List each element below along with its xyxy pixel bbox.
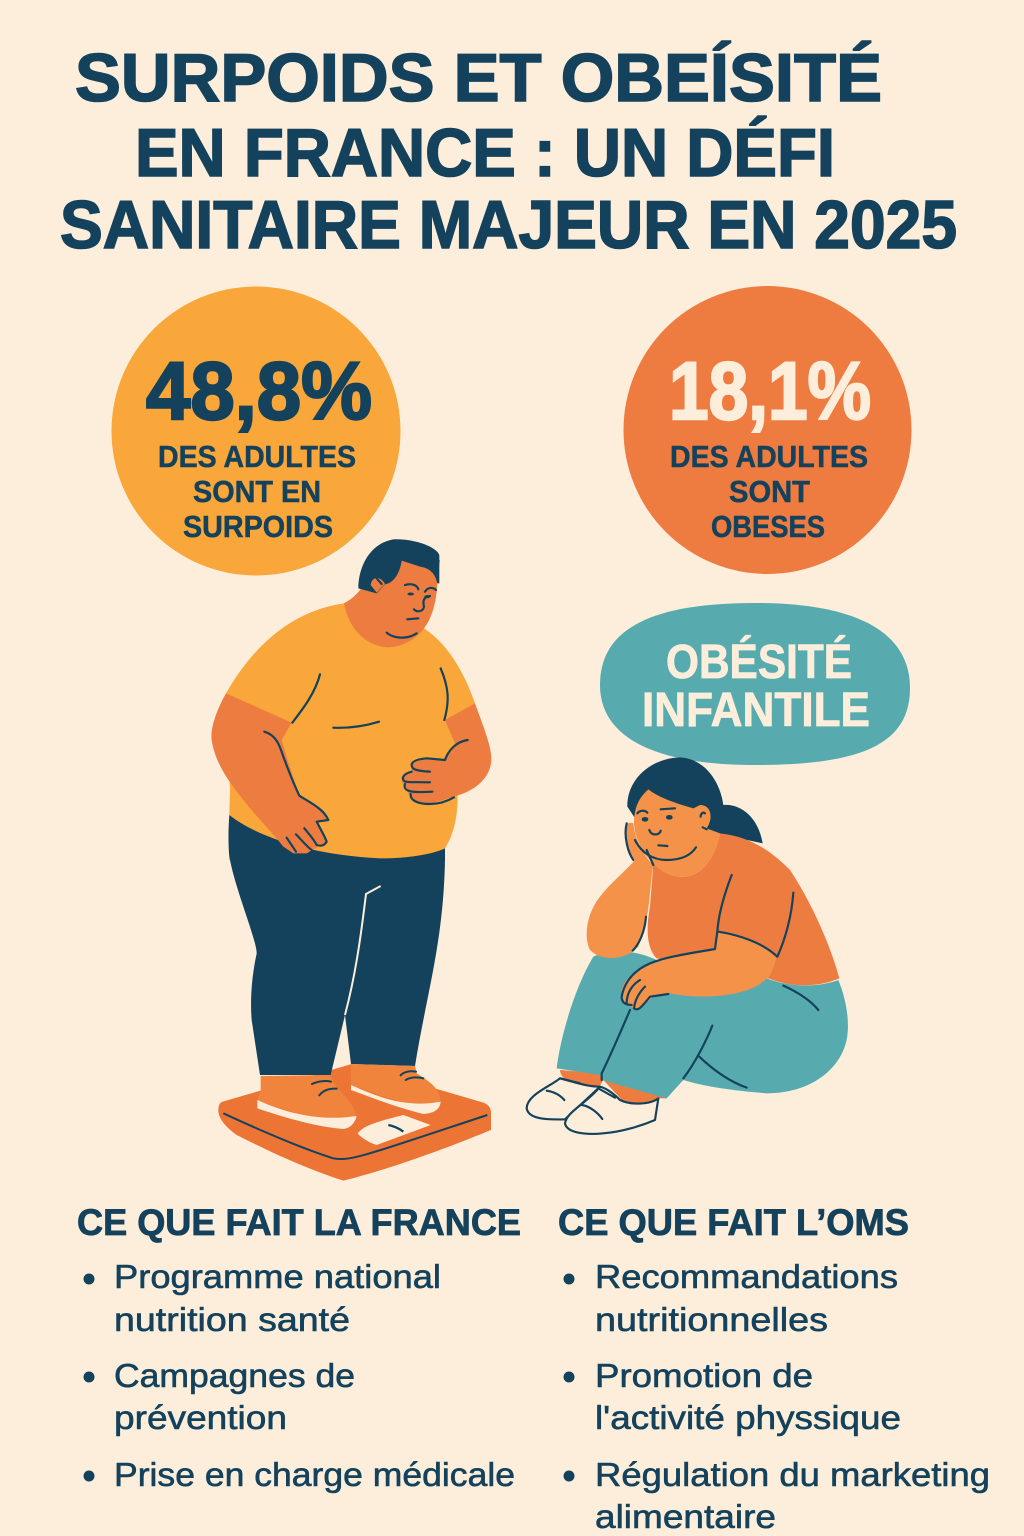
torso, arms and head [211,539,491,858]
panel: what France does [77,1202,521,1493]
stat circle: overweight adults: 48,8% [146,346,372,437]
illustration: sad seated girl [527,757,848,1134]
panel: what WHO does [558,1202,990,1535]
speech bubble: childhood obesity: OBÉSITÉ [666,635,852,689]
stat circle: obese adults [624,286,912,574]
stat circle: obese adults: OBESES [711,509,825,544]
bullet list: nutritionnelles [595,1301,828,1338]
stat circle: overweight adults: SURPOIDS [183,509,333,544]
arms [621,932,777,1010]
bullet list [84,1258,515,1493]
stat circle: overweight adults: DES ADULTES [158,439,356,474]
bullet list: prévention [114,1399,287,1436]
illustration: man standing on scale [211,539,491,1181]
speech bubble: childhood obesity: INFANTILE [642,684,870,737]
heading: CE QUE FAIT L’OMS [558,1202,909,1243]
bullet list: Programme national [114,1258,441,1295]
stat circle: obese adults: SONT [729,474,810,509]
title [60,40,957,263]
stat circle: overweight adults [112,286,400,576]
stat circle: overweight adults: SONT EN [193,474,321,509]
trousers [228,815,445,1075]
ankles [560,1070,667,1104]
stat circle: obese adults: DES ADULTES [670,439,868,474]
trousers [557,951,848,1098]
bullet list: Recommandations [595,1258,898,1295]
shoes [527,1078,600,1119]
bullet list [564,1258,990,1535]
bullet list: Promotion de [595,1357,813,1394]
title: SANITAIRE MAJEUR EN 2025 [60,187,957,263]
heading: CE QUE FAIT LA FRANCE [77,1202,521,1243]
hair [627,757,763,843]
bullet list: Campagnes de [114,1357,355,1394]
stat circle: obese adults: 18,1% [669,346,871,437]
title: SURPOIDS ET OBEÍSITÉ [75,40,882,116]
bullet list: l'activité physsique [595,1399,901,1436]
bullet list: nutrition santé [114,1301,350,1338]
speech bubble: childhood obesity [600,603,910,765]
title: EN FRANCE : UN DÉFI [135,115,835,191]
face and neck [634,789,720,877]
shoes [257,1064,441,1129]
bullet list: Prise en charge médicale [114,1456,515,1493]
t-shirt [648,833,839,985]
bullet list: alimentaire [595,1498,776,1535]
bullet list: Régulation du marketing [595,1456,990,1493]
line details [547,808,818,1119]
bathroom scale [218,1064,491,1181]
